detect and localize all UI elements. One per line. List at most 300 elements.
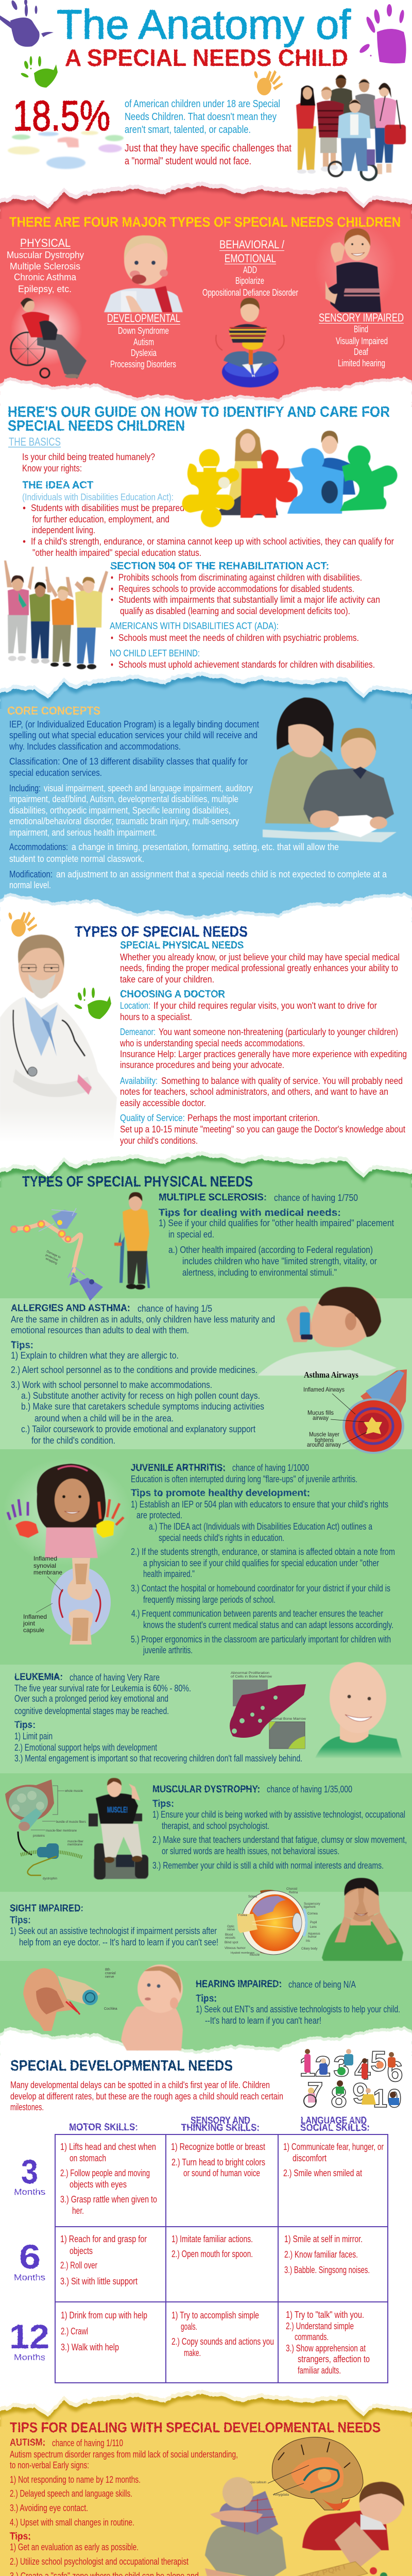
- diagram: damaged neuron: [11, 1208, 103, 1301]
- diagram: eye: Sclera: [248, 1895, 258, 1899]
- text: multiple sclerosis: alertness, including to environmental stimuli.": [182, 1267, 337, 1278]
- core concepts text: Accommodations:: [9, 842, 68, 852]
- text: autism: 1) Not responding to name by 12 months.: [10, 2475, 141, 2485]
- IDEA act text: [22, 492, 394, 558]
- section 504 text: •: [111, 595, 113, 605]
- diagram: inner ear: [23, 1968, 117, 2031]
- text: allergies and asthma: b.) Make sure that caretakers schedule symptoms inducing activities: [21, 1401, 264, 1412]
- intro text red: [125, 143, 291, 167]
- diagram: bone marrow: Normal Bone Marrow: [270, 1717, 306, 1721]
- choosing a doctor text: Quality of Service:: [120, 1113, 185, 1123]
- column headers: SOCIAL SKILLS:: [300, 2123, 370, 2133]
- cells: 12 months: 2.) Crawl: [61, 2326, 88, 2336]
- icon: kids and numbers: 10: [373, 2084, 402, 2113]
- text: leukemia: 2.) Emotional support helps with development: [14, 1742, 157, 1753]
- diagram: brain: [247, 2437, 379, 2511]
- diagram: eye: Vitreous humor: [225, 1947, 246, 1950]
- diagram: muscle and dystrophin: membrane: [67, 1843, 83, 1846]
- diagram: muscle and dystrophin: muscle-fiber membrane: [46, 1829, 77, 1833]
- IDEA act text: for further education, employment, and: [32, 514, 169, 524]
- diagram: eye: [225, 1888, 320, 1957]
- choosing a doctor text: Location:: [120, 1001, 150, 1011]
- cells: 12 months: goals.: [181, 2321, 197, 2332]
- photo: boy with crutches: [114, 1192, 150, 1290]
- chart: milestones table: [9, 2115, 388, 2383]
- diagram: inner ear: cranial: [105, 1972, 116, 1975]
- panel: special developmental needs: [9, 2045, 403, 2383]
- column: developmental: DEVELOPMENTAL: [107, 312, 180, 325]
- diagram: bone marrow: Abnormal Proliferation: [231, 1671, 269, 1675]
- column: physical: Epilepsy, etc.: [18, 284, 72, 294]
- cells: 3 months: 1) Lifts head and chest when: [60, 2142, 156, 2152]
- core concepts text: Modification:: [9, 869, 53, 879]
- icon: kids and numbers: 4: [354, 2053, 371, 2086]
- photo: boy hiding his face: [205, 2477, 286, 2576]
- text: sight impaired: 1) Seek out an assistive technologist if impairment persists after: [10, 1926, 217, 1936]
- cells: 12 months: familiar adults.: [298, 2365, 341, 2376]
- photo: doctor: [0, 935, 124, 1142]
- column: behavioral / emotional: ADD: [243, 265, 257, 275]
- diagram: brain: Amygdala: [273, 2494, 289, 2497]
- column: sensory impaired: Limited hearing: [338, 358, 385, 368]
- text: leukemia: cognitive developmental stages may be reached.: [14, 1706, 169, 1716]
- core concepts text: impairment, and serious health impairment.: [9, 827, 157, 838]
- text: allergies and asthma: 2.) Alert school personnel as to the conditions and provide medicines.: [11, 1365, 258, 1375]
- text: allergies and asthma: [11, 1303, 275, 1446]
- row label: 3 months: [14, 2153, 45, 2197]
- diagram: inflamed joint: [23, 1555, 111, 1645]
- text: allergies and asthma: around when a child will be in the area.: [35, 1413, 174, 1423]
- heading: ADA: AMERICANS WITH DISABILITIES ACT (ADA):: [110, 621, 279, 631]
- block: autism: [10, 2437, 404, 2576]
- diagram: inner ear: nerve: [105, 1975, 114, 1979]
- cells: 12 months: 3.) Walk with help: [61, 2342, 119, 2352]
- cells: 3 months: her.: [72, 2206, 84, 2216]
- core concepts text: why. Includes classification and accommodations.: [9, 741, 181, 752]
- diagram: eye: nerve: [227, 1928, 235, 1931]
- choosing a doctor text: hours to a specialist.: [120, 1012, 192, 1022]
- ADA text: Schools must meet the needs of children with psychiatric problems.: [118, 633, 359, 643]
- text: muscular dystrophy: chance of having 1/35,000: [267, 1784, 352, 1794]
- text: allergies and asthma: Tips:: [11, 1340, 33, 1351]
- title block: [0, 0, 406, 95]
- choosing a doctor text: insurance procedures and being your advocate.: [120, 1060, 284, 1070]
- cells: 12 months: 1) Drink from cup with help: [61, 2310, 147, 2320]
- choosing a doctor text: your child's conditions.: [120, 1136, 198, 1146]
- row label: 3 months: Months: [14, 2187, 45, 2197]
- section 504 text: •: [111, 572, 113, 583]
- photo: boy making OK sign: [314, 222, 397, 314]
- core concepts text: a change in timing, presentation, formatting, setting, etc. that will allow the: [72, 842, 339, 852]
- IDEA act text: (Individuals with Disabilities Education Act):: [22, 492, 174, 502]
- intro text: develop at different rates, but these are the rough ages a child should reach certain: [10, 2091, 283, 2102]
- diagram: asthma airways: Muscle layer: [309, 1431, 339, 1438]
- text: leukemia: Tips:: [14, 1720, 36, 1731]
- text: autism: 4.) Upset with small changes in routine.: [10, 2517, 134, 2528]
- row label: 3 months: 3: [21, 2153, 38, 2191]
- photo: boy on spinning toy: [216, 298, 284, 387]
- core concepts text: special education services.: [9, 768, 102, 778]
- heading: no child left behind: NO CHILD LEFT BEHIND:: [110, 648, 200, 658]
- text: juvenile arthritis: health impaired.": [143, 1569, 195, 1579]
- basics text: Know your rights:: [22, 463, 82, 473]
- choosing a doctor text: Perhaps the most important criterion.: [187, 1113, 320, 1123]
- text: hearing impaired: Tips:: [196, 1993, 217, 2004]
- cells: 12 months: make.: [184, 2348, 201, 2358]
- photo: teacher and boy: [263, 698, 397, 842]
- intro text: milestones.: [10, 2102, 44, 2112]
- diagram: eye: Optic: [227, 1925, 234, 1928]
- column: developmental: Dyslexia: [131, 348, 157, 358]
- diagram: inflamed joint: Inflamed: [23, 1613, 47, 1620]
- panel: types of special physical needs: [0, 1151, 412, 2071]
- text: multiple sclerosis: includes children who have "limited strength, vitality, or: [182, 1256, 377, 1266]
- row label: 12 months: Months: [14, 2352, 45, 2362]
- text: autism: 2.) Delayed speech and language skills.: [10, 2488, 132, 2499]
- photo: bald smiling boy: [314, 1662, 404, 1759]
- text: muscular dystrophy: therapist, and school psychologist.: [162, 1821, 269, 1831]
- column: physical: Chronic Asthma: [14, 272, 77, 282]
- icon: green handprint: [20, 56, 58, 88]
- text: leukemia: [14, 1672, 302, 1764]
- basics text: [22, 452, 155, 473]
- big number: 18.5%: [13, 92, 110, 140]
- core concepts text: impairment, deaf/blind, Autism, developmental disabilities, multiple: [9, 794, 238, 804]
- choosing a doctor text: Availability:: [120, 1076, 158, 1086]
- core concepts text: spelling out what special education services your child will receive and: [9, 730, 258, 740]
- heading: A Special Needs Child: A SPECIAL NEEDS CHILD: [65, 44, 348, 71]
- section 504 text: Students with impairments that substantially limit a major life activity can: [118, 595, 380, 605]
- heading: the IDEA act: THE IDEA ACT: [22, 480, 93, 491]
- block: muscular dystrophy: [5, 1778, 407, 1880]
- cells: 6 months: objects: [70, 2246, 93, 2256]
- photo: group of teens: [296, 75, 406, 180]
- diagram: eye: Iris: [306, 1940, 310, 1943]
- IDEA act text: independent living.: [32, 525, 95, 535]
- text: juvenile arthritis: chance of having 1/1000: [232, 1463, 309, 1473]
- photo: boy with inhaler: [258, 1287, 397, 1376]
- column: developmental: Processing Disorders: [110, 359, 176, 369]
- heading: special developmental needs: SPECIAL DEVELOPMENTAL NEEDS: [10, 2058, 233, 2074]
- photo: boy in wheelchair: [10, 294, 87, 379]
- diagram: asthma airways: [303, 1369, 407, 1454]
- cells: 3 months: 2.) Follow people and moving: [60, 2168, 150, 2178]
- icon: kids and numbers: 8: [331, 2081, 347, 2113]
- diagram: asthma airways: around airway: [307, 1441, 341, 1448]
- text: multiple sclerosis: Tips for dealing with medical needs:: [159, 1208, 341, 1218]
- column: behavioral / emotional: [202, 238, 298, 298]
- diagram: inflamed joint: membrane: [33, 1569, 62, 1576]
- text: muscular dystrophy: or slurred words are health issues, not behavioral issues.: [162, 1846, 339, 1856]
- section 504 text: [111, 572, 380, 616]
- diagram: asthma airways: tightens: [315, 1436, 334, 1444]
- photo: kids cheering: [4, 561, 108, 669]
- diagram: muscle and dystrophin: bundle of muscle fibers: [56, 1821, 86, 1824]
- icon: kids and numbers: 7: [307, 2076, 323, 2108]
- diagram: asthma airways: airway: [313, 1414, 329, 1421]
- diagram: eye: Blind spot: [225, 1941, 238, 1944]
- no child left behind text: •: [111, 659, 113, 670]
- diagram: brain: Cerebellum: [364, 2487, 379, 2490]
- text: leukemia: Over such a prolonged period key emotional and: [14, 1693, 168, 1704]
- heading: types of special physical needs: TYPES OF SPECIAL PHYSICAL NEEDS: [22, 1174, 253, 1190]
- row label: 6 months: [14, 2238, 45, 2282]
- cells: 6 months: 1) Smile at self in mirror.: [284, 2234, 363, 2244]
- text: leukemia: chance of having Very Rare: [70, 1672, 160, 1683]
- icon: kids and numbers: 3: [333, 2050, 350, 2082]
- text: hearing impaired: [196, 1979, 400, 2026]
- row label: 6 months: 6: [19, 2238, 41, 2276]
- column headers: THINKING SKILLS:: [181, 2123, 260, 2133]
- diagram: eye: Cornea: [307, 1912, 318, 1916]
- text: autism: [10, 2438, 238, 2576]
- heading: muscular dystrophy: MUSCULAR DYSTROPHY:: [152, 1784, 260, 1795]
- text: autism: Tips:: [10, 2531, 31, 2542]
- core concepts text: IEP, (or Individualized Education Program) is a legally binding document: [9, 719, 259, 730]
- block: sight impaired: [10, 1878, 403, 1961]
- cells: 3 months: discomfort: [293, 2153, 327, 2163]
- text: autism: 3.) Avoiding eye contact.: [10, 2503, 88, 2513]
- diagram: eye: Pupil: [310, 1921, 317, 1924]
- text: allergies and asthma: emotional resources than adults to deal with them.: [11, 1325, 189, 1335]
- core concepts text: disabilities, orthopedic impairment, Specific learning disabilities,: [9, 805, 231, 816]
- cells: 3 months: 2.) Smile when smiled at: [283, 2168, 362, 2178]
- text: autism: 1) Get an evaluation as early as possible.: [10, 2542, 139, 2552]
- column: physical: [7, 236, 84, 294]
- heading: our guide: SPECIAL NEEDS CHILDREN: [8, 418, 185, 434]
- column headers: MOTOR SKILLS:: [69, 2122, 138, 2133]
- panel: four major types: [0, 182, 412, 422]
- icon: kids and numbers: [299, 2045, 403, 2113]
- core concepts text: emotional/behavioral disorder, traumatic brain injury, multi-sensory: [9, 816, 239, 826]
- IDEA act text: Students with disabilities must be prepared: [31, 503, 184, 513]
- question marks image: [8, 131, 124, 169]
- intro text red: a "normal" student would not face.: [125, 156, 251, 167]
- diagram: eye: humor: [308, 1936, 317, 1939]
- choosing a doctor text: [119, 1001, 407, 1146]
- heading: The Anatomy of: The Anatomy of: [57, 2, 351, 47]
- diagram: muscle and dystrophin: [5, 1780, 86, 1880]
- diagram: eye: Suspensory: [304, 1903, 320, 1906]
- icon: kids and numbers: 5: [370, 2045, 387, 2077]
- cells: 12 months: 1) Try to accomplish simple: [171, 2310, 259, 2320]
- column: physical: PHYSICAL: [20, 236, 71, 249]
- diagram: damaged neuron: wrapping: [44, 1257, 58, 1265]
- cells: 6 months: 3.) Sit with little support: [60, 2276, 138, 2286]
- column: physical: Multiple Sclerosis: [10, 261, 80, 272]
- diagram: inflamed joint: synovial: [33, 1562, 56, 1569]
- column: developmental: Down Syndrome: [118, 326, 169, 336]
- heading: section 504: SECTION 504 OF THE REHABILITATION ACT:: [110, 561, 329, 572]
- text: juvenile arthritis: [131, 1463, 395, 1655]
- no child left behind text: Schools must uphold achievement standards for children with disabilities.: [118, 659, 375, 670]
- heading: hearing impaired: HEARING IMPAIRED:: [196, 1979, 282, 1990]
- icon: green handprint: [74, 988, 111, 1019]
- text: sight impaired: [10, 1915, 218, 1947]
- diagram: eye: Hyaloid membrane: [231, 1952, 254, 1955]
- icon: kids and numbers: 9: [352, 2077, 369, 2109]
- heading: special physical needs: SPECIAL PHYSICAL NEEDS: [120, 940, 244, 951]
- photo: boy covering his eyes: [322, 1878, 403, 1961]
- diagram: eye: vessels: [225, 1937, 235, 1940]
- photo: boy in power wheelchair: [89, 1778, 148, 1879]
- IDEA act text: •: [23, 503, 26, 513]
- intro text blue: of American children under 18 are Special: [125, 98, 280, 110]
- text: allergies and asthma: a.) Substitute another activity for recess on high pollen count days.: [21, 1391, 260, 1401]
- core concepts text: normal level.: [9, 880, 51, 890]
- text: juvenile arthritis: special needs child's rights in education.: [159, 1533, 284, 1543]
- photo: kids with puzzle pieces: [182, 429, 398, 527]
- diagram: eye: ligament: [304, 1906, 316, 1909]
- text: allergies and asthma: c.) Tailor coursework to provide emotional and explanatory support: [21, 1424, 255, 1434]
- text: multiple sclerosis: a.) Other health impaired (according to Federal regulation): [168, 1245, 373, 1255]
- block: leukemia: [14, 1662, 404, 1764]
- text: autism: Autism spectrum disorder ranges from mild lack of social understanding,: [10, 2449, 238, 2460]
- subheading: the basics: THE BASICS: [9, 435, 61, 448]
- text: leukemia: 1) Limit pain: [14, 1731, 53, 1741]
- cells: 3 months: on stomach: [70, 2153, 106, 2163]
- stat: 18.5% with question marks: [8, 92, 291, 169]
- diagram: eye: Ciliary body: [301, 1947, 317, 1951]
- diagram: muscle and dystrophin: dystrophin: [43, 1877, 57, 1880]
- text: multiple sclerosis: in special ed.: [168, 1229, 214, 1240]
- diagram: eye: Blood: [225, 1934, 233, 1937]
- cells: 3 months: 1) Recognize bottle or breast: [171, 2142, 265, 2152]
- diagram: asthma airways: Asthma Airways: [304, 1370, 358, 1380]
- choosing a doctor text: If your child requires regular visits, you won't want to drive for: [153, 1001, 377, 1011]
- column: behavioral / emotional: Oppositional Defiance Disorder: [202, 287, 298, 298]
- cells: 12 months: strangers, affection to: [298, 2354, 370, 2364]
- diagram: eye: Fovea: [238, 1914, 247, 1917]
- IDEA act text: "other health impaired" special education status.: [32, 548, 201, 558]
- column: sensory impaired: Blind: [354, 324, 368, 334]
- heading: allergies and asthma: ALLERGIES AND ASTHMA:: [11, 1303, 130, 1314]
- icon: kids and numbers: 1: [299, 2050, 316, 2082]
- intro text red: Just that they have specific challenges that: [125, 143, 291, 154]
- diagram: inner ear: Cochlea: [104, 2007, 117, 2011]
- diagram: damaged neuron: Damage to: [46, 1250, 61, 1259]
- column headers: LANGUAGE AND: [301, 2115, 367, 2126]
- icon: blue handprint: [0, 0, 54, 47]
- photo: boy in power wheelchair: MUSCLE!: [107, 1806, 128, 1815]
- heading: autism: AUTISM:: [10, 2437, 45, 2448]
- heading: sight impaired: SIGHT IMPAIRED:: [10, 1903, 83, 1914]
- core concepts text: Classification: One of 13 different disability classes that qualify for: [9, 756, 248, 767]
- text: allergies and asthma: 1) Explain to children what they are allergic to.: [11, 1350, 179, 1361]
- diagram: eye: Aqueous: [308, 1933, 320, 1936]
- cells: 6 months: 1) Reach for and grasp for: [60, 2234, 147, 2244]
- intro text: [10, 2080, 283, 2112]
- panel: guide to identify and care: [4, 404, 398, 670]
- diagram: bone marrow: [230, 1671, 306, 1749]
- cells: 3 months: [60, 2142, 384, 2216]
- diagram: eye: Choroid: [286, 1888, 297, 1891]
- cells: 6 months: 3.) Babble. Singsong noises.: [284, 2265, 370, 2275]
- section 504 text: Requires schools to provide accommodations for disabled students.: [118, 584, 354, 594]
- intro text blue: [125, 98, 280, 135]
- cells: 6 months: [60, 2234, 370, 2286]
- text: multiple sclerosis: chance of having 1/750: [274, 1193, 358, 1203]
- text: leukemia: 3.) Mental engagement is important so that recovering children don't fall massively behind.: [14, 1753, 302, 1764]
- icon: kids and numbers: 2: [315, 2050, 331, 2082]
- diagram: bone marrow: of Cells in Bone Marrow: [231, 1675, 272, 1679]
- heading: multiple sclerosis: MULTIPLE SCLEROSIS:: [159, 1192, 267, 1203]
- physical needs text: take care of your children.: [120, 974, 214, 985]
- diagram: inflamed joint: capsule: [23, 1626, 44, 1634]
- icon: orange handprint: [8, 911, 37, 937]
- heading: our guide: [8, 404, 390, 434]
- text: sight impaired: help from an eye doctor. -- It's hard to learn if you can't see!: [19, 1937, 218, 1947]
- panel: core concepts: [0, 672, 412, 938]
- core concepts text: student to complete normal classwork.: [9, 854, 144, 864]
- cells: 3 months: 2.) Turn head to bright colors: [171, 2157, 265, 2167]
- diagram: eye: Retina: [289, 1891, 298, 1894]
- heading: juvenile arthritis: JUVENILE ARTHRITIS:: [131, 1463, 226, 1473]
- text: muscular dystrophy: [152, 1784, 407, 1871]
- column: physical: Muscular Dystrophy: [7, 250, 84, 260]
- core concepts text: [9, 719, 387, 890]
- core concepts text: visual impairment, speech and language impairment, auditory: [44, 783, 253, 793]
- diagram: inflamed joint: Inflamed: [33, 1555, 57, 1562]
- IDEA act text: •: [23, 536, 26, 547]
- cells: 12 months: 3.) Show apprehension at: [286, 2343, 366, 2353]
- text: multiple sclerosis: [159, 1193, 394, 1278]
- core concepts text: Including:: [9, 783, 41, 793]
- text: hearing impaired: --It's hard to learn if you can't hear!: [205, 2015, 321, 2026]
- row label: 6 months: Months: [14, 2273, 45, 2282]
- panel: tips for developmental needs: [0, 2390, 412, 2576]
- cells: 12 months: 2.) Understand simple: [286, 2321, 354, 2331]
- section 504 text: •: [111, 584, 113, 594]
- section 504 text: qualify as disabled (learning and social development deficits too).: [120, 606, 350, 616]
- icon: orange handprint: [253, 70, 283, 95]
- column: sensory impaired: [319, 311, 404, 368]
- text: allergies and asthma: 3.) Work with school personnel to make accommodations.: [11, 1380, 212, 1390]
- cells: 6 months: 2.) Roll over: [60, 2260, 97, 2270]
- block: hearing impaired: [23, 1964, 400, 2050]
- text: juvenile arthritis: frequently missing large periods of school.: [143, 1595, 276, 1605]
- column: behavioral / emotional: EMOTIONAL: [225, 252, 276, 265]
- column: developmental: [107, 312, 180, 369]
- heading: leukemia: LEUKEMIA:: [14, 1672, 63, 1683]
- cells: 12 months: [61, 2310, 370, 2376]
- cells: 6 months: 2.) Know familiar faces.: [284, 2249, 358, 2260]
- text: allergies and asthma: for the child's condition.: [31, 1435, 115, 1446]
- heading: choosing a doctor: CHOOSING A DOCTOR: [120, 989, 226, 1000]
- text: allergies and asthma: Are the same in children as in adults, only children have less maturity and: [11, 1314, 275, 1325]
- text: hearing impaired: chance of being N/A: [288, 1979, 356, 1990]
- column headers: SENSORY AND: [191, 2115, 250, 2126]
- diagram: asthma airways: Inflamed Airways: [303, 1386, 345, 1393]
- column: behavioral / emotional: BEHAVIORAL /: [219, 238, 285, 251]
- diagram: muscle and dystrophin: proteins: [33, 1835, 45, 1838]
- diagram: eye: Muscle: [250, 1954, 260, 1957]
- diagram: muscle and dystrophin: muscle-fiber: [67, 1840, 83, 1843]
- text: sight impaired: Tips:: [10, 1915, 31, 1926]
- diagram: inflamed joint: joint: [23, 1620, 36, 1627]
- intro text blue: aren't smart, talented, or capable.: [125, 124, 251, 135]
- text: leukemia: The five year survival rate for Leukemia is 60% - 80%.: [14, 1683, 191, 1693]
- diagram: eye: Lens: [310, 1926, 317, 1929]
- heading: core concepts: CORE CONCEPTS: [7, 704, 100, 717]
- physical needs text: [120, 952, 400, 985]
- diagram: brain: Corpus callosum: [247, 2481, 266, 2484]
- column: sensory impaired: Visually Impaired: [336, 336, 388, 346]
- text: allergies and asthma: chance of having 1/5: [138, 1303, 212, 1314]
- panel: types of special needs: [0, 911, 407, 1146]
- diagram: asthma airways: Mucus fills: [307, 1409, 334, 1416]
- photo: baby looking up: [121, 1964, 183, 2050]
